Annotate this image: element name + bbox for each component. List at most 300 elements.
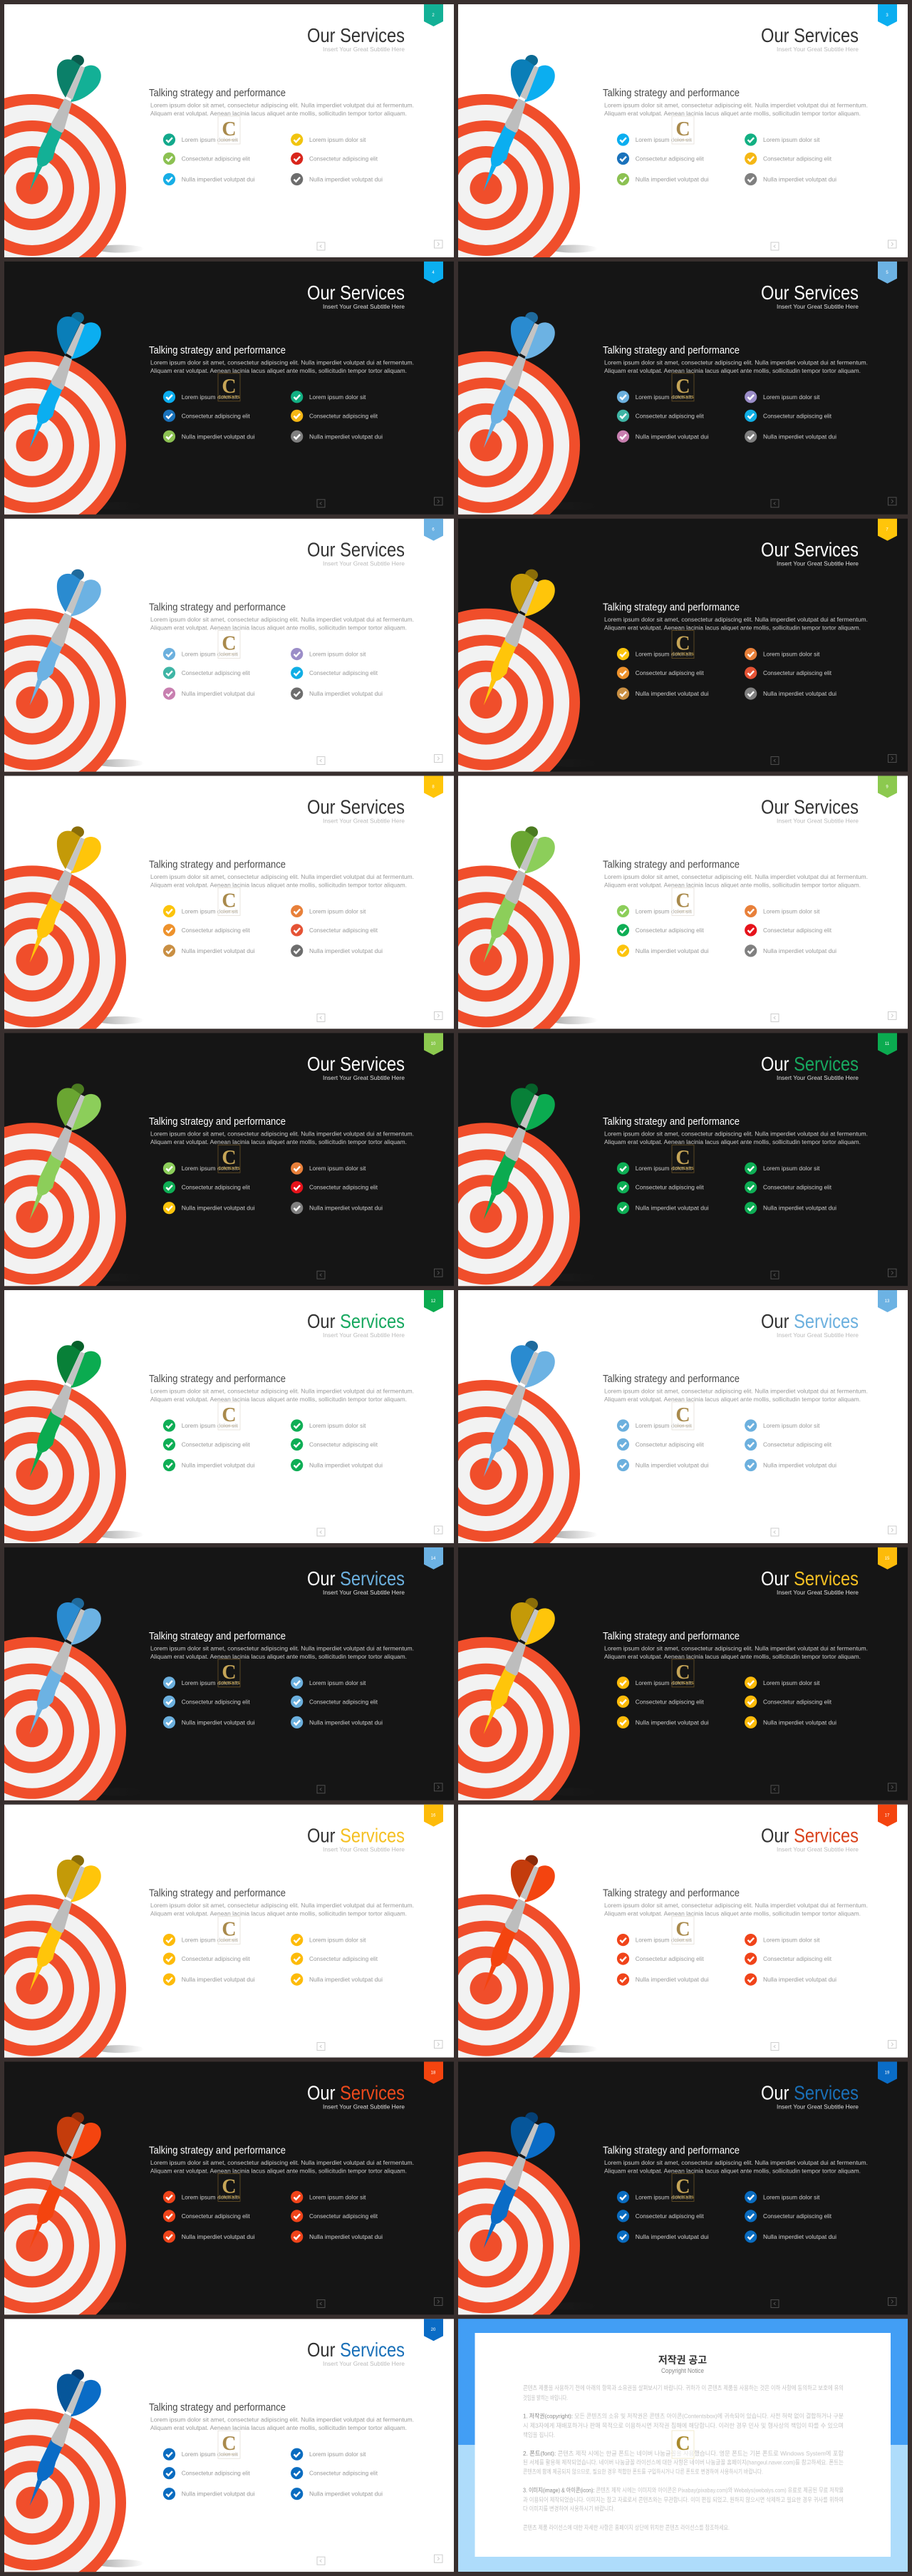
- subtitle: Insert Your Great Subtitle Here: [777, 303, 859, 310]
- checklist: Consectetur adipiscing elit: [763, 412, 832, 419]
- subtitle: Insert Your Great Subtitle Here: [323, 2360, 405, 2367]
- title: Our Services: [307, 282, 405, 304]
- checklist: Lorem ipsum dolor sit: [763, 393, 820, 401]
- watermark: C: [675, 1919, 690, 1941]
- dart: [484, 1341, 555, 1477]
- checklist: Consectetur adipiscing elit: [763, 669, 832, 676]
- notice title: 저작권 공고: [658, 2354, 707, 2366]
- checklist: Consectetur adipiscing elit: [309, 155, 378, 163]
- page tag: 3: [886, 14, 888, 18]
- checklist: Lorem ipsum dolor sit: [636, 1679, 692, 1686]
- slide 8: white yellow: [0, 776, 454, 1053]
- checklist: Nulla imperdiet volutpat dui: [636, 1719, 709, 1726]
- navigation icons: [317, 2555, 442, 2565]
- title: Our Services: [761, 282, 859, 304]
- body text: Lorem ipsum dolor sit amet, consectetur adipiscing elit. Nulla imperdiet volutpat dui at fermentum.: [604, 1644, 868, 1652]
- heading: Talking strategy and performance: [603, 1116, 740, 1128]
- subtitle: Insert Your Great Subtitle Here: [323, 560, 405, 567]
- checklist: Consectetur adipiscing elit: [182, 155, 250, 163]
- page tag: [878, 2061, 897, 2083]
- notice body: 것임을 밝히는 바입니다.: [523, 2394, 568, 2401]
- checklist: Lorem ipsum dolor sit: [309, 2451, 366, 2458]
- body text: [150, 2159, 414, 2174]
- body text: [604, 2159, 868, 2174]
- navigation icons: [317, 1783, 442, 1793]
- checklist: Lorem ipsum dolor sit: [309, 1679, 366, 1686]
- page tag: [878, 776, 897, 798]
- checklist: Consectetur adipiscing elit: [636, 155, 704, 163]
- checklist: Lorem ipsum dolor sit: [182, 651, 238, 658]
- body text: [604, 103, 868, 117]
- watermark: [218, 2173, 240, 2201]
- checklist: Lorem ipsum dolor sit: [636, 1165, 692, 1172]
- checklist: Nulla imperdiet volutpat dui: [636, 690, 709, 697]
- body text: [604, 616, 868, 632]
- checklist: [617, 1934, 836, 1986]
- navigation icons: [317, 1269, 442, 1279]
- heading: Talking strategy and performance: [603, 87, 740, 99]
- page tag: [424, 776, 443, 798]
- slide 20: white navy accent: [0, 2319, 454, 2576]
- slide 15: dark yellow accent: [392, 1547, 908, 1825]
- heading: Talking strategy and performance: [149, 2401, 286, 2413]
- title: Our Services: [761, 1567, 859, 1590]
- dartboard: [458, 94, 593, 257]
- watermark: CONTENTS: [218, 2195, 240, 2200]
- subtitle: Insert Your Great Subtitle Here: [777, 1589, 859, 1596]
- checklist: Lorem ipsum dolor sit: [636, 1422, 692, 1429]
- page tag: 14: [431, 1557, 436, 1561]
- page tag: 19: [885, 2071, 890, 2075]
- checklist: Consectetur adipiscing elit: [763, 1184, 832, 1191]
- navigation icons: [317, 498, 442, 508]
- subtitle: Insert Your Great Subtitle Here: [777, 1074, 859, 1081]
- checklist: Nulla imperdiet volutpat dui: [763, 1976, 836, 1983]
- dartboard: [392, 865, 598, 1053]
- body text: [150, 1902, 414, 1917]
- notice body: 다 이미지를 변경하여 사용하시기 바랍니다.: [523, 2505, 615, 2512]
- checklist: Nulla imperdiet volutpat dui: [309, 433, 383, 440]
- watermark: CONTENTS: [218, 1681, 240, 1686]
- body text: Lorem ipsum dolor sit amet, consectetur adipiscing elit. Nulla imperdiet volutpat dui at fermentum.: [150, 1387, 414, 1394]
- body text: Aliquam erat volutpat. Aenean lacinia lacus aliquet ante mollis, sollicitudin tempor tortor aliquam.: [150, 1910, 407, 1917]
- watermark: C: [222, 1404, 237, 1426]
- body text: [604, 1902, 868, 1917]
- watermark: [218, 1917, 240, 1944]
- navigation icons: [771, 1011, 896, 1021]
- checklist: [163, 1419, 383, 1471]
- checklist: Nulla imperdiet volutpat dui: [763, 947, 836, 954]
- dart: [30, 312, 101, 448]
- subtitle: Insert Your Great Subtitle Here: [323, 817, 405, 824]
- slide 13: white light blue accent: [392, 1290, 908, 1568]
- checklist: Nulla imperdiet volutpat dui: [182, 1976, 255, 1983]
- subtitle: Insert Your Great Subtitle Here: [323, 46, 405, 53]
- navigation icons: [771, 498, 896, 508]
- body text: Aliquam erat volutpat. Aenean lacinia lacus aliquet ante mollis, sollicitudin tempor tortor aliquam.: [604, 1138, 861, 1145]
- checklist: Nulla imperdiet volutpat dui: [182, 2490, 255, 2498]
- checklist: [163, 1163, 383, 1214]
- page tag: 6: [432, 528, 435, 532]
- watermark: C: [222, 1919, 237, 1941]
- watermark: [218, 116, 240, 144]
- watermark: [672, 2173, 694, 2201]
- checklist: Nulla imperdiet volutpat dui: [636, 947, 709, 954]
- watermark: [672, 1659, 694, 1687]
- body text: Aliquam erat volutpat. Aenean lacinia lacus aliquet ante mollis, sollicitudin tempor tortor aliquam.: [150, 1138, 407, 1145]
- watermark: [218, 1402, 240, 1430]
- checklist: Consectetur adipiscing elit: [763, 155, 832, 163]
- body text: Aliquam erat volutpat. Aenean lacinia lacus aliquet ante mollis, sollicitudin tempor tortor aliquam.: [604, 2167, 861, 2174]
- body text: Aliquam erat volutpat. Aenean lacinia lacus aliquet ante mollis, sollicitudin tempor tortor aliquam.: [604, 1653, 861, 1660]
- checklist: [617, 1419, 836, 1471]
- title: Our Services: [307, 2081, 405, 2103]
- dart: [30, 826, 101, 962]
- checklist: [163, 2448, 383, 2500]
- watermark: CONTENTS: [220, 910, 238, 913]
- page tag: 15: [885, 1557, 890, 1561]
- body text: [150, 1130, 414, 1145]
- checklist: Consectetur adipiscing elit: [636, 669, 704, 676]
- checklist: Nulla imperdiet volutpat dui: [182, 1205, 255, 1212]
- watermark: CONTENTS: [220, 653, 238, 656]
- checklist: Lorem ipsum dolor sit: [309, 393, 366, 401]
- notice body: 3. 이미지(image) & 아이콘(icon): 콘텐츠 제작 시에는 이미지와 아이콘은 Pixabay(pixabay.com)와 Webalys(webalys.com) 유료로 제공된 무료 저작물: [523, 2486, 844, 2493]
- dartboard: [392, 1123, 598, 1311]
- body text: [150, 2416, 414, 2431]
- body text: Lorem ipsum dolor sit amet, consectetur adipiscing elit. Nulla imperdiet volutpat dui at fermentum.: [604, 1902, 868, 1909]
- checklist: Nulla imperdiet volutpat dui: [636, 175, 709, 182]
- dart: [484, 55, 555, 191]
- title: Our Services: [761, 2081, 859, 2103]
- watermark: [672, 116, 694, 144]
- checklist: Lorem ipsum dolor sit: [309, 651, 366, 658]
- checklist: Nulla imperdiet volutpat dui: [636, 2233, 709, 2240]
- watermark: [672, 2431, 694, 2458]
- dartboard: [4, 351, 126, 515]
- watermark: CONTENTS: [672, 653, 694, 657]
- checklist: [163, 133, 383, 185]
- title: Our Services: [761, 1310, 859, 1332]
- checklist: Consectetur adipiscing elit: [182, 1441, 250, 1448]
- checklist: Lorem ipsum dolor sit: [182, 1679, 238, 1686]
- checklist: Lorem ipsum dolor sit: [182, 393, 238, 401]
- subtitle: Insert Your Great Subtitle Here: [323, 1331, 405, 1339]
- checklist: Consectetur adipiscing elit: [182, 2212, 250, 2220]
- page tag: 5: [886, 271, 888, 275]
- title: Our Services: [761, 1825, 859, 1847]
- title: Our Services: [307, 1825, 405, 1847]
- navigation icons: [771, 755, 896, 765]
- body text: Lorem ipsum dolor sit amet, consectetur adipiscing elit. Nulla imperdiet volutpat dui at fermentum.: [604, 1387, 868, 1394]
- watermark: C: [222, 2433, 237, 2455]
- heading: Talking strategy and performance: [149, 344, 286, 356]
- checklist: Consectetur adipiscing elit: [636, 1955, 704, 1962]
- checklist: Nulla imperdiet volutpat dui: [182, 1461, 255, 1468]
- dartboard: [0, 1380, 144, 1568]
- slide 5: dark light blue: [458, 261, 908, 515]
- body text: Aliquam erat volutpat. Aenean lacinia lacus aliquet ante mollis, sollicitudin tempor tortor aliquam.: [150, 881, 407, 888]
- dartboard: [0, 2408, 144, 2576]
- watermark: CONTENTS: [218, 396, 240, 400]
- checklist: Lorem ipsum dolor sit: [636, 136, 692, 143]
- watermark: CONTENTS: [672, 1167, 694, 1171]
- navigation icons: [317, 1011, 442, 1021]
- subtitle: Insert Your Great Subtitle Here: [323, 1846, 405, 1853]
- page tag: 11: [885, 1042, 890, 1046]
- body text: Lorem ipsum dolor sit amet, consectetur adipiscing elit. Nulla imperdiet volutpat dui at fermentum.: [604, 1130, 868, 1138]
- checklist: [163, 648, 383, 700]
- slide 11: dark green: [392, 1033, 908, 1311]
- watermark: [672, 1402, 694, 1430]
- checklist: [163, 1934, 383, 1986]
- watermark: C: [222, 1147, 237, 1169]
- checklist: Consectetur adipiscing elit: [309, 927, 378, 934]
- body text: [150, 103, 413, 117]
- checklist: Lorem ipsum dolor sit: [309, 1937, 366, 1944]
- checklist: Lorem ipsum dolor sit: [182, 2451, 238, 2458]
- watermark: [672, 887, 694, 915]
- title: Our Services: [307, 539, 405, 561]
- navigation icons: [317, 2041, 442, 2051]
- checklist: Lorem ipsum dolor sit: [309, 2193, 366, 2200]
- checklist: Nulla imperdiet volutpat dui: [182, 690, 255, 697]
- checklist: Nulla imperdiet volutpat dui: [636, 1976, 709, 1983]
- heading: Talking strategy and performance: [149, 1630, 286, 1642]
- title: Our Services: [307, 795, 405, 818]
- slide 12: white green: [0, 1290, 454, 1568]
- slide 4: dark blue: [0, 262, 454, 540]
- body text: Aliquam erat volutpat. Aenean lacinia lacus aliquet ante mollis, sollicitudin tempor tortor aliquam.: [604, 110, 861, 117]
- body text: Aliquam erat volutpat. Aenean lacinia lacus aliquet ante mollis, sollicitudin tempor tortor aliquam.: [150, 367, 407, 374]
- page tag: [424, 1290, 443, 1312]
- notice body: 된 서체를 활용해 제작되었습니다. 네이버 나눔글꼴 라이선스에 대한 사항은 네이버 나눔글꼴 홈페이지(hangeul.naver.com)를 참고하세요. 폰트는: [523, 2459, 844, 2466]
- title: Our Services: [307, 24, 405, 46]
- dartboard: [392, 1380, 598, 1568]
- checklist: Consectetur adipiscing elit: [636, 927, 704, 934]
- watermark: [672, 1145, 694, 1173]
- checklist: Consectetur adipiscing elit: [636, 412, 704, 419]
- checklist: Consectetur adipiscing elit: [182, 2470, 250, 2477]
- watermark: C: [675, 1661, 690, 1684]
- checklist: Nulla imperdiet volutpat dui: [182, 1719, 255, 1726]
- checklist: Consectetur adipiscing elit: [309, 1698, 378, 1705]
- checklist: Nulla imperdiet volutpat dui: [309, 2490, 383, 2498]
- checklist: [617, 1676, 836, 1729]
- page tag: [424, 519, 443, 541]
- subtitle: Insert Your Great Subtitle Here: [323, 2103, 405, 2110]
- navigation icons: [771, 1269, 896, 1279]
- checklist: Nulla imperdiet volutpat dui: [182, 433, 255, 440]
- subtitle: Insert Your Great Subtitle Here: [777, 2103, 859, 2110]
- checklist: Lorem ipsum dolor sit: [763, 651, 820, 658]
- heading: Talking strategy and performance: [149, 602, 286, 614]
- checklist: Consectetur adipiscing elit: [182, 1184, 250, 1191]
- checklist: [617, 2191, 836, 2242]
- checklist: Nulla imperdiet volutpat dui: [309, 2233, 383, 2240]
- page tag: 10: [431, 1042, 436, 1046]
- slide 16: white yellow accent: [0, 1805, 454, 2083]
- watermark: [218, 1145, 240, 1173]
- checklist: [617, 648, 836, 700]
- watermark: C: [675, 1404, 690, 1426]
- navigation icons: [771, 240, 896, 250]
- page tag: [424, 2319, 443, 2341]
- slide 17: white red accent: [392, 1805, 908, 2083]
- checklist: Consectetur adipiscing elit: [636, 1698, 704, 1705]
- dartboard: [392, 1895, 598, 2083]
- watermark: CONTENTS: [672, 1681, 694, 1686]
- checklist: Lorem ipsum dolor sit: [309, 1422, 366, 1429]
- checklist: Nulla imperdiet volutpat dui: [636, 1205, 709, 1212]
- page tag: [878, 262, 897, 284]
- checklist: Consectetur adipiscing elit: [763, 1955, 832, 1962]
- page tag: 9: [886, 785, 888, 789]
- dartboard: [392, 609, 598, 797]
- body text: [604, 1130, 868, 1145]
- watermark: CONTENTS: [220, 1424, 238, 1428]
- watermark: C: [675, 118, 690, 140]
- watermark: [672, 373, 694, 401]
- title: Our Services: [761, 539, 859, 561]
- checklist: [163, 905, 383, 957]
- checklist: Lorem ipsum dolor sit: [763, 1165, 820, 1172]
- checklist: Nulla imperdiet volutpat dui: [309, 947, 383, 954]
- dart: [30, 2112, 101, 2248]
- page tag: 17: [885, 1814, 890, 1818]
- watermark: C: [675, 2433, 690, 2455]
- checklist: Lorem ipsum dolor sit: [182, 1937, 238, 1944]
- body text: [604, 1387, 868, 1403]
- subtitle: Insert Your Great Subtitle Here: [777, 46, 859, 53]
- watermark: CONTENTS: [674, 1939, 692, 1942]
- checklist: Nulla imperdiet volutpat dui: [309, 1719, 383, 1726]
- navigation icons: [771, 1783, 896, 1793]
- heading: Talking strategy and performance: [149, 2144, 286, 2156]
- slide 2: white teal: [0, 4, 454, 282]
- body text: [150, 1387, 414, 1403]
- page tag: 16: [431, 1814, 436, 1818]
- dartboard: [0, 1895, 144, 2083]
- checklist: [617, 133, 836, 185]
- dartboard: [4, 94, 140, 257]
- dart: [484, 312, 555, 448]
- navigation icons: [317, 1526, 442, 1536]
- checklist: Nulla imperdiet volutpat dui: [763, 1461, 836, 1468]
- notice body: 콘텐츠 제품을 사용하기 전에 아래의 항목과 소유권을 살펴보시기 바랍니다. 귀하가 이 콘텐츠 제품을 사용하는 것은 이하 사항에 동의하고 보호에 유의: [523, 2384, 844, 2391]
- title: Our Services: [761, 24, 859, 46]
- body text: Lorem ipsum dolor sit amet, consectetur adipiscing elit. Nulla imperdiet volutpat dui at fermentum.: [604, 873, 868, 880]
- dartboard: [0, 1637, 144, 1825]
- checklist: Consectetur adipiscing elit: [763, 1441, 832, 1448]
- title: Our Services: [307, 1053, 405, 1075]
- title: Our Services: [307, 1310, 405, 1332]
- body text: [604, 873, 868, 888]
- checklist: Lorem ipsum dolor sit: [636, 2193, 692, 2200]
- slide 9: white light green: [392, 776, 908, 1053]
- dartboard: [0, 609, 144, 797]
- subtitle: Insert Your Great Subtitle Here: [777, 1331, 859, 1339]
- checklist: Lorem ipsum dolor sit: [182, 1422, 238, 1429]
- watermark: [672, 1917, 694, 1944]
- watermark: CONTENTS: [220, 1939, 238, 1942]
- panel: copyright notice: [458, 2319, 908, 2572]
- slide 19: dark navy accent: [392, 2061, 908, 2339]
- checklist: Lorem ipsum dolor sit: [636, 907, 692, 915]
- body text: Aliquam erat volutpat. Aenean lacinia lacus aliquet ante mollis, sollicitudin tempor tortor aliquam.: [604, 367, 861, 374]
- page tag: 12: [431, 1299, 436, 1304]
- watermark: C: [222, 1661, 237, 1684]
- title: Our Services: [307, 1567, 405, 1590]
- body text: [150, 873, 414, 888]
- body text: Lorem ipsum dolor sit amet, consectetur adipiscing elit. Nulla imperdiet volutpat dui at fermentum.: [150, 1902, 414, 1909]
- checklist: Nulla imperdiet volutpat dui: [309, 1205, 383, 1212]
- watermark: CONTENTS: [674, 910, 692, 913]
- notice body: 1. 저작권(copyright): 모든 콘텐츠의 소유 및 저작권은 콘텐츠 아이콘(Contentsbox)에 귀속되어 있습니다. 사전 허락 없이 결합하거나 구분: [523, 2412, 844, 2419]
- dart: [30, 55, 101, 191]
- heading: Talking strategy and performance: [603, 2144, 740, 2156]
- body text: Lorem ipsum dolor sit amet, consectetur adipiscing elit. Nulla imperdiet volutpat dui at fermentum.: [150, 616, 414, 623]
- subtitle: Insert Your Great Subtitle Here: [323, 1074, 405, 1081]
- checklist: Lorem ipsum dolor sit: [636, 651, 692, 658]
- dart: [30, 1855, 101, 1992]
- watermark: [672, 631, 694, 659]
- body text: Aliquam erat volutpat. Aenean lacinia lacus aliquet ante mollis, sollicitudin tempor tortor aliquam.: [604, 1910, 861, 1917]
- body text: [604, 1644, 868, 1660]
- watermark: [218, 2431, 240, 2458]
- watermark: CONTENTS: [672, 2195, 694, 2200]
- page tag: 4: [432, 271, 435, 275]
- watermark: [218, 887, 240, 915]
- checklist: Lorem ipsum dolor sit: [182, 1165, 238, 1172]
- watermark: C: [675, 376, 690, 398]
- watermark: C: [222, 2175, 237, 2198]
- checklist: Lorem ipsum dolor sit: [309, 136, 366, 143]
- page tag: 7: [886, 528, 888, 532]
- title: Our Services: [761, 795, 859, 818]
- checklist: Nulla imperdiet volutpat dui: [309, 1976, 383, 1983]
- checklist: [617, 1163, 836, 1214]
- heading: Talking strategy and performance: [149, 87, 286, 99]
- body text: Aliquam erat volutpat. Aenean lacinia lacus aliquet ante mollis, sollicitudin tempor tortor aliquam.: [150, 1653, 407, 1660]
- checklist: Lorem ipsum dolor sit: [309, 907, 366, 915]
- dart: [30, 2369, 101, 2505]
- notice body: 책임을 집니다.: [523, 2431, 555, 2438]
- page tag: [424, 262, 443, 284]
- body text: [150, 1644, 414, 1660]
- slide 14: dark light blue accent: [0, 1547, 454, 1825]
- heading: Talking strategy and performance: [603, 602, 740, 614]
- body text: Lorem ipsum dolor sit amet, consectetur adipiscing elit. Nulla imperdiet volutpat dui at fermentum.: [150, 2416, 414, 2423]
- page tag: [878, 1290, 897, 1312]
- watermark: C: [675, 890, 690, 912]
- watermark: CONTENTS: [218, 1167, 240, 1171]
- page tag: [878, 1033, 897, 1055]
- dart: [30, 1341, 101, 1477]
- checklist: Consectetur adipiscing elit: [309, 2470, 378, 2477]
- checklist: Consectetur adipiscing elit: [763, 1698, 832, 1705]
- body text: Lorem ipsum dolor sit amet, consectetur adipiscing elit. Nulla imperdiet volutpat dui at fermentum.: [604, 359, 868, 366]
- dart: [484, 1083, 555, 1220]
- checklist: Consectetur adipiscing elit: [763, 2212, 832, 2220]
- notice body: [523, 2384, 844, 2531]
- page tag: [424, 4, 443, 26]
- slide 3: white blue: [458, 4, 908, 257]
- watermark: C: [222, 118, 237, 140]
- checklist: Consectetur adipiscing elit: [182, 1955, 250, 1962]
- slide 10: dark light green: [0, 1033, 454, 1311]
- dartboard: [0, 865, 144, 1053]
